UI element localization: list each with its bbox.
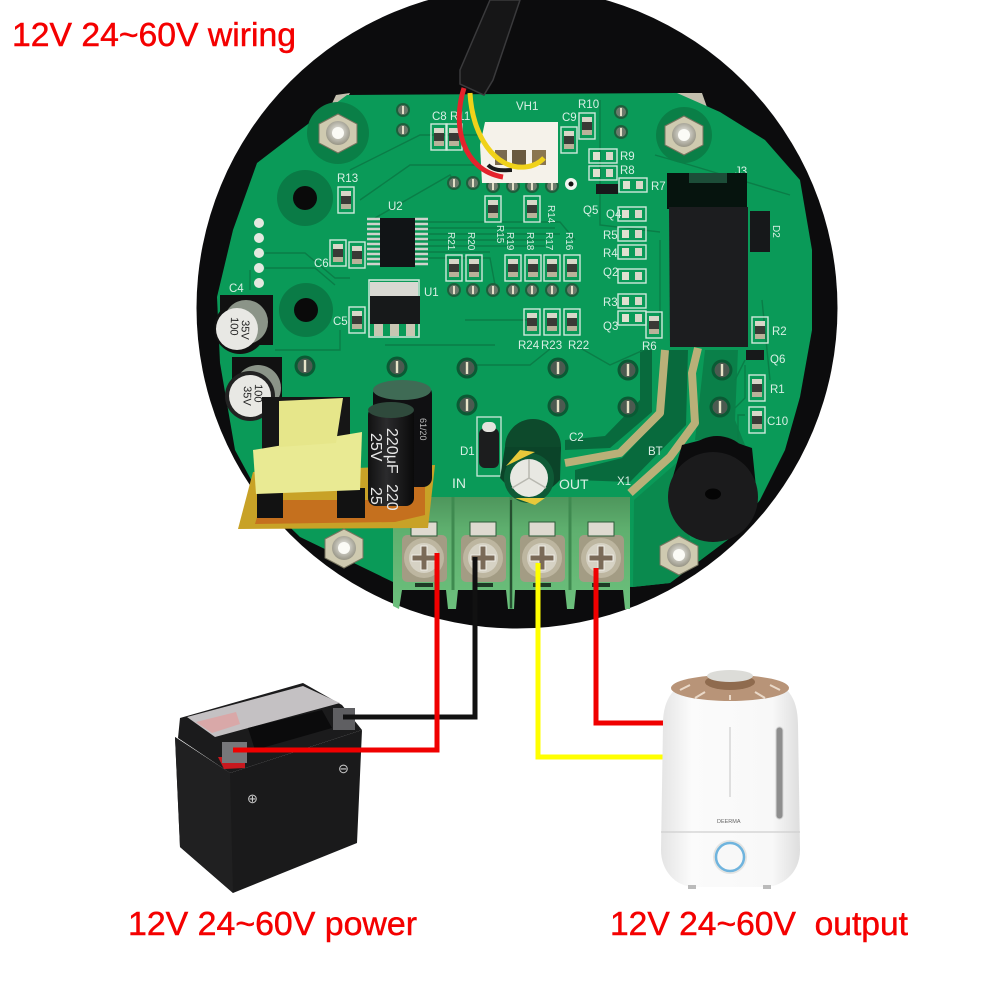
silkscreen labels: R24 xyxy=(518,340,540,352)
humidifier top xyxy=(671,675,789,701)
silkscreen labels: C9 xyxy=(562,112,577,124)
silkscreen labels: C8 xyxy=(432,111,447,123)
capacitor 100uF 35V: 100 xyxy=(251,384,264,403)
silkscreen labels: U2 xyxy=(388,201,403,213)
battery body xyxy=(175,730,362,893)
feet xyxy=(688,885,771,889)
silkscreen labels: R22 xyxy=(568,340,589,352)
silkscreen labels: R18 xyxy=(524,232,535,251)
silkscreen labels: U1 xyxy=(424,287,439,299)
relay J3 xyxy=(667,173,770,347)
yellow output wire xyxy=(538,563,664,757)
green circuit board xyxy=(217,93,812,587)
silkscreen labels: C2 xyxy=(569,432,584,444)
controller back: round black housing with circuit board xyxy=(196,0,838,628)
buzzer xyxy=(668,436,758,542)
gold solder traces xyxy=(565,348,698,493)
humidifier xyxy=(661,670,800,889)
battery well xyxy=(248,710,332,750)
red output wire xyxy=(596,568,664,723)
electrolytic capacitors 220uF: 25V xyxy=(367,433,384,462)
silkscreen labels: R9 xyxy=(620,151,635,163)
silkscreen labels: D2 xyxy=(770,225,781,238)
silkscreen labels: Q6 xyxy=(770,354,785,366)
silkscreen labels: R21 xyxy=(445,232,456,251)
silkscreen labels: Q2 xyxy=(603,267,618,279)
battery label xyxy=(187,686,340,737)
silkscreen labels: D1 xyxy=(460,446,475,458)
silkscreen labels: R23 xyxy=(541,340,562,352)
water level window xyxy=(776,727,783,819)
power label: 12V 24~60V power xyxy=(128,905,417,942)
capacitor C2 xyxy=(500,419,561,505)
silkscreen labels: R1 xyxy=(770,384,785,396)
silkscreen labels xyxy=(229,99,788,492)
dial xyxy=(713,840,747,874)
electrolytic capacitors 220uF xyxy=(367,380,432,511)
title: 12V 24~60V wiring xyxy=(12,16,296,53)
polarity marks: ⊖ xyxy=(338,761,349,776)
terminal block xyxy=(393,497,630,609)
capacitor 100uF 35V xyxy=(225,357,282,421)
electrolytic capacitors 220uF: 220μF xyxy=(383,428,400,474)
silkscreen labels: C10 xyxy=(767,416,788,428)
battery terminals xyxy=(218,757,245,769)
capacitor C4: 100 xyxy=(227,317,240,336)
regulator U1 xyxy=(369,280,420,337)
electrolytic capacitors 220uF: 220 xyxy=(383,484,400,511)
small capacitors xyxy=(214,295,282,421)
diode D1 xyxy=(477,417,501,476)
capacitor 100uF 35V: 35V xyxy=(240,386,253,407)
polarity marks xyxy=(247,761,349,806)
silkscreen labels: Q3 xyxy=(603,321,618,333)
black housing xyxy=(196,0,838,628)
mounting nuts xyxy=(307,102,712,575)
silkscreen labels: C4 xyxy=(229,283,244,295)
metal corners xyxy=(328,93,708,112)
power module: yellow board and transformer xyxy=(238,380,435,529)
silkscreen labels: R15 xyxy=(494,225,505,244)
capacitor C4 xyxy=(214,295,273,354)
silkscreen labels: R4 xyxy=(603,248,618,260)
wires xyxy=(233,553,664,757)
silkscreen labels: R19 xyxy=(504,232,515,251)
silkscreen labels: R6 xyxy=(642,341,657,353)
silkscreen labels: VH1 xyxy=(516,101,538,113)
SMD resistors and capacitors xyxy=(330,113,768,433)
silkscreen labels: R5 xyxy=(603,230,618,242)
electrolytic capacitors 220uF: 61/20 xyxy=(418,418,428,441)
electrolytic capacitors 220uF: 25 xyxy=(367,487,384,505)
silkscreen labels: X1 xyxy=(617,476,631,488)
mounting holes xyxy=(277,170,333,337)
silkscreen labels: R2 xyxy=(772,326,787,338)
silkscreen labels: R14 xyxy=(545,205,556,224)
silkscreen labels: R3 xyxy=(603,297,618,309)
polarity marks: ⊕ xyxy=(247,791,258,806)
silkscreen labels: R20 xyxy=(465,232,476,251)
silkscreen labels: OUT xyxy=(559,476,589,492)
silkscreen labels: R16 xyxy=(563,232,574,251)
chip U2 xyxy=(367,218,428,267)
battery xyxy=(175,683,362,893)
sensor cable xyxy=(460,0,520,95)
black wire xyxy=(343,557,475,717)
red power wire xyxy=(233,553,437,750)
through-hole pins xyxy=(294,103,732,418)
silkscreen labels: C5 xyxy=(333,316,348,328)
silkscreen labels: R11 xyxy=(450,111,470,123)
silkscreen labels: R8 xyxy=(620,165,635,177)
silkscreen labels: R7 xyxy=(651,181,666,193)
test pads xyxy=(254,218,264,288)
silkscreen labels: IN xyxy=(452,475,466,491)
silkscreen labels: R10 xyxy=(578,99,599,111)
silkscreen labels: R13 xyxy=(337,173,358,185)
humidifier body xyxy=(661,680,800,887)
battery lid xyxy=(178,683,362,773)
copper traces xyxy=(250,100,790,440)
silkscreen labels: C6 xyxy=(314,258,329,270)
capacitor C4: 35V xyxy=(238,320,251,341)
silkscreen labels: R17 xyxy=(543,232,554,251)
sensor connector VH1 xyxy=(459,88,558,183)
output label: 12V 24~60V output xyxy=(610,905,908,942)
silkscreen labels: BT xyxy=(648,446,663,458)
silkscreen labels: J3 xyxy=(735,166,747,178)
silkscreen labels: Q5 xyxy=(583,205,598,217)
humidifier: DEERMA xyxy=(717,819,741,825)
silkscreen labels: Q4 xyxy=(606,209,622,221)
